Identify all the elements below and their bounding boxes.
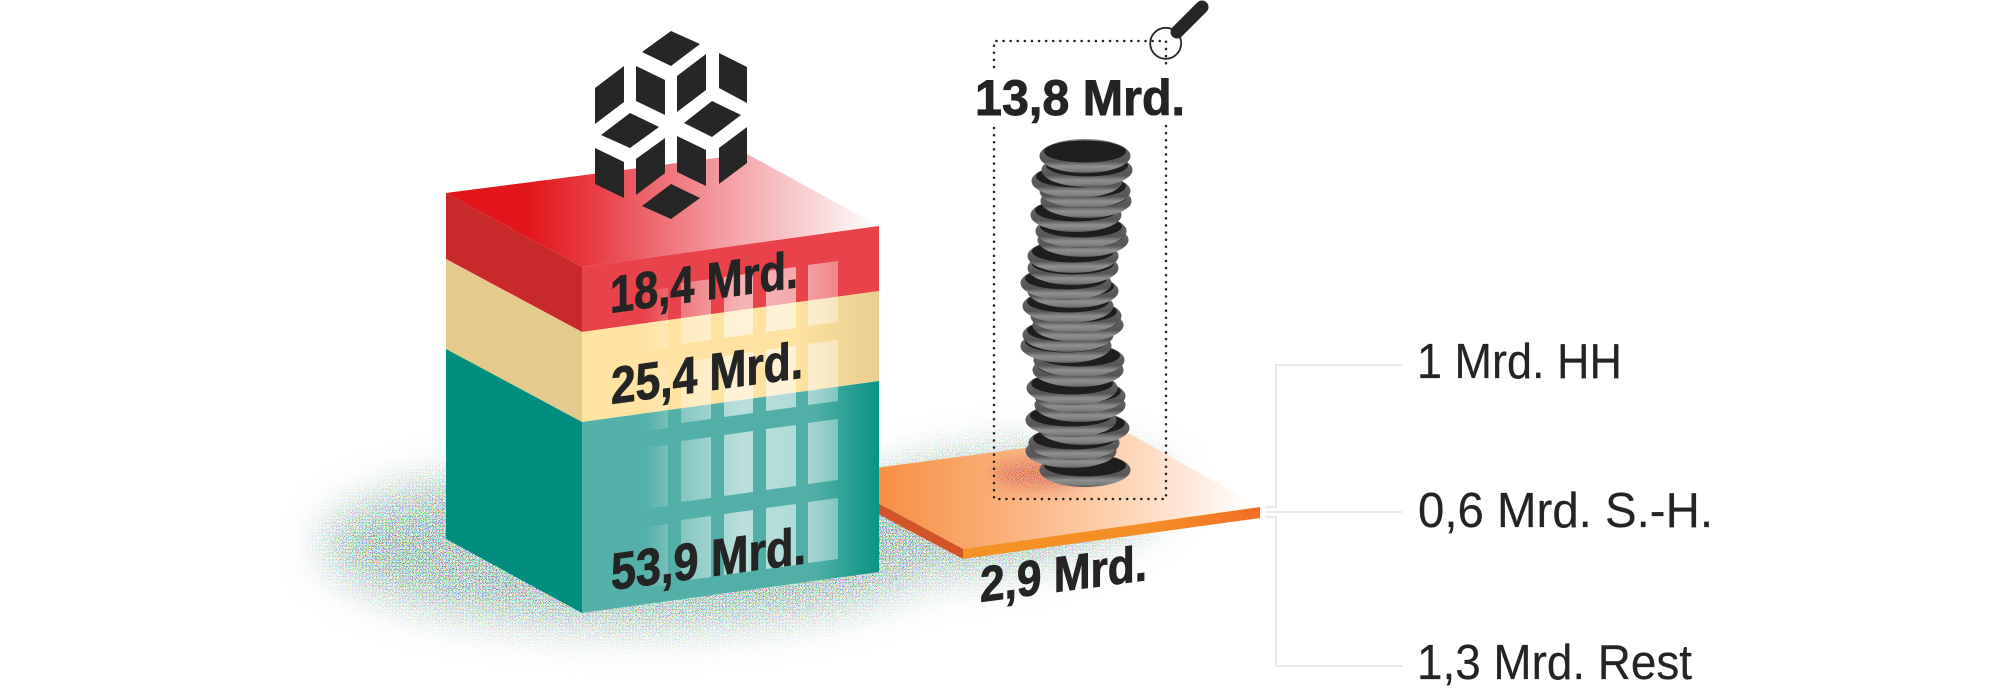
cube top face xyxy=(446,154,879,267)
label: 2,9 Mrd.: 2,9 Mrd. xyxy=(980,535,1147,613)
coin stack xyxy=(1020,139,1132,487)
label: 1 Mrd. HH: 1 Mrd. HH xyxy=(1417,335,1622,389)
label: 1,3 Mrd. Rest: 1,3 Mrd. Rest xyxy=(1417,636,1692,690)
label: 18,4 Mrd.: 18,4 Mrd. xyxy=(610,241,798,325)
label: 53,9 Mrd.: 53,9 Mrd. xyxy=(611,517,806,602)
cube front faces xyxy=(582,226,879,613)
icon: magnifying glass xyxy=(1150,7,1202,59)
orange plate (2,9 Mrd.) xyxy=(860,434,1260,559)
stacked cube xyxy=(446,154,879,613)
connector lines xyxy=(1265,365,1402,666)
icon: hexagonal cube logo xyxy=(595,31,747,219)
building windows xyxy=(644,261,838,588)
noise ground shadow xyxy=(323,429,1176,627)
grain shadow of coin stack on plate xyxy=(992,460,1088,488)
cube left faces xyxy=(446,193,582,613)
dotted zoom frame xyxy=(994,41,1166,499)
label: 0,6 Mrd. S.-H.: 0,6 Mrd. S.-H. xyxy=(1418,484,1713,538)
label: 25,4 Mrd.: 25,4 Mrd. xyxy=(611,332,803,416)
label: 13,8 Mrd.: 13,8 Mrd. xyxy=(975,70,1185,126)
